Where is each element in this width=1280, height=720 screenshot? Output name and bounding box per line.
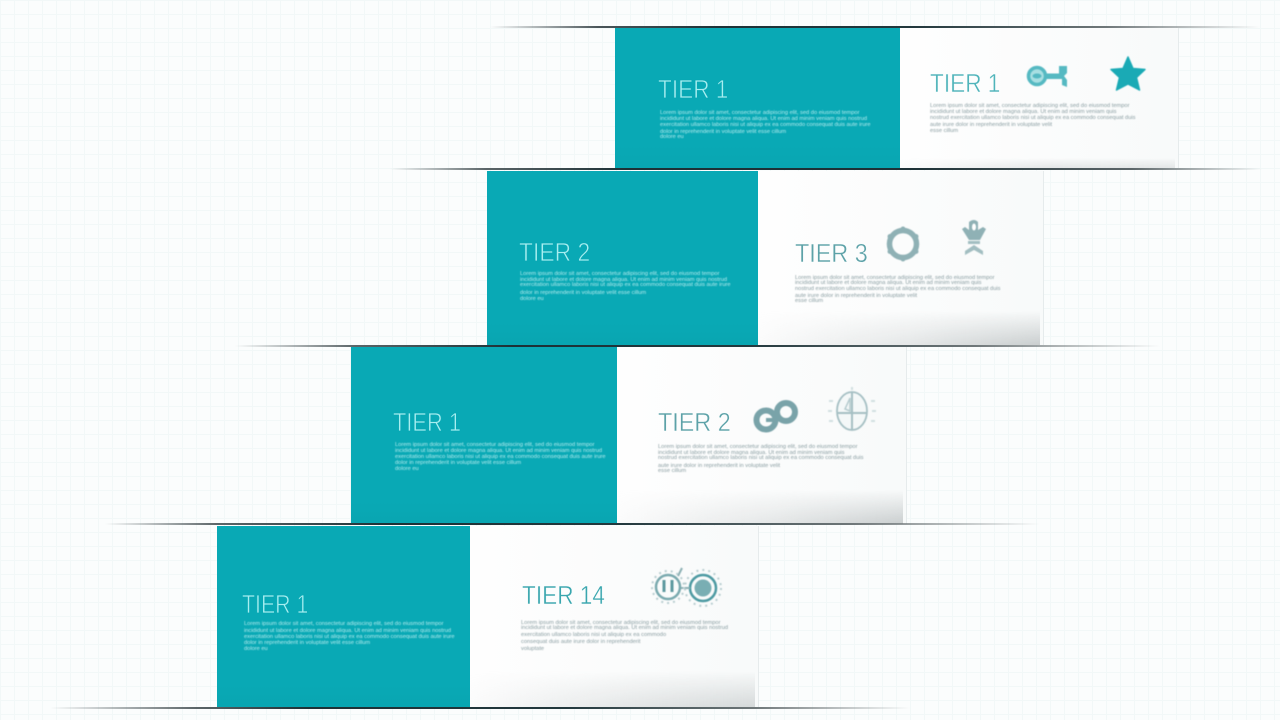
text block: row 1 teal body: Lorem ipsum dolor sit amet, consectetur adipiscing elit, sed do eiusmod tempor [660,110,859,116]
panel: row 3 teal [351,347,617,524]
text block: row 2 teal body: dolore eu [520,296,544,302]
text block: row 3 white body: aute irure dolor in reprehenderit in voluptate velit [658,463,780,469]
text block: row 4 teal body: dolor in reprehenderit in voluptate velit esse cillum [244,640,370,646]
text block: row 4 white body: consequat duis aute irure dolor in reprehenderit [521,639,641,645]
icon: globe dial [828,386,876,432]
panel: row 4 teal [217,526,470,707]
text block: row 1 white body [930,102,1136,134]
icon: robot figure [962,220,986,256]
heading: row 2 white title: TIER 3 [795,238,868,268]
text block: row 3 teal body: Lorem ipsum dolor sit amet, consectetur adipiscing elit, sed do eiusmod tempor [395,442,594,448]
icon: gear ring [886,226,920,262]
heading: row 3 white title: TIER 2 [658,407,731,437]
icon: dial pair [650,567,722,608]
text block: row 1 teal body [660,110,871,140]
text block: row 3 white body: incididunt ut labore et dolore magna aliqua. Ut enim ad minim veniam quis [658,450,845,456]
icon: key [1026,65,1068,88]
text block: row 2 white body: incididunt ut labore et dolore magna aliqua. Ut enim ad minim veniam quis [795,280,982,286]
text block: row 2 white body: esse cillum [795,298,823,304]
text block: row 1 teal body: incididunt ut labore et dolore magna aliqua. Ut enim ad minim veniam quis nostrud [660,116,867,122]
text block: row 3 white body [658,444,864,474]
text block: row 3 white body: esse cillum [658,468,686,474]
text block: row 3 white body: nostrud exercitation ullamco laboris nisi ut aliquip ex ea commodo consequat duis [658,455,864,461]
panel: row 4 white [470,526,759,707]
heading: row 1 white title: TIER 1 [930,68,1000,98]
text block: row 2 white body: nostrud exercitation ullamco laboris nisi ut aliquip ex ea commodo consequat duis [795,286,1000,292]
panel: row 2 teal [487,171,758,345]
text block: row 4 teal body: incididunt ut labore et dolore magna aliqua. Ut enim ad minim veniam quis nostrud [244,628,451,634]
text block: row 3 teal body: dolor in reprehenderit in voluptate velit esse cillum [395,460,521,466]
heading: row 3 teal title: TIER 1 [393,407,461,437]
text block: row 2 teal body: Lorem ipsum dolor sit amet, consectetur adipiscing elit, sed do eiusmod tempor [520,271,719,277]
text block: row 3 teal body: incididunt ut labore et dolore magna aliqua. Ut enim ad minim veniam quis nostrud [395,448,602,454]
text block: row 4 white body: Lorem ipsum dolor sit amet, consectetur adipiscing elit, sed do eiusmod tempor [521,620,720,626]
text block: row 2 white body: aute irure dolor in reprehenderit in voluptate velit [795,293,917,299]
heading: row 1 teal title: TIER 1 [658,74,728,104]
text block: row 1 white body: nostrud exercitation ullamco laboris nisi ut aliquip ex ea commodo consequat duis [930,115,1136,121]
text block: row 2 teal body [520,270,731,302]
text block: row 4 white body: voluptate [521,646,544,652]
tier row 2 [487,171,1044,345]
text block: row 1 teal body: dolor in reprehenderit in voluptate velit esse cillum [660,129,786,135]
text block: row 2 teal body: dolor in reprehenderit in voluptate velit esse cillum [520,290,646,296]
text block: row 4 teal body: Lorem ipsum dolor sit amet, consectetur adipiscing elit, sed do eiusmod tempor [244,621,443,627]
tier row 3 [351,347,907,524]
text block: row 1 white body: Lorem ipsum dolor sit amet, consectetur adipiscing elit, sed do eiusmod tempor [930,103,1129,109]
text block: row 1 teal body: dolore eu [660,134,684,140]
icon: linked gears [752,399,799,434]
text block: row 4 teal body: exercitation ullamco laboris nisi ut aliquip ex ea commodo consequat duis aute irure [244,634,455,640]
text block: row 3 white body: Lorem ipsum dolor sit amet, consectetur adipiscing elit, sed do eiusmod tempor [658,444,857,450]
text block: row 1 teal body: exercitation ullamco laboris nisi ut aliquip ex ea commodo consequat duis aute irure [660,122,871,128]
text block: row 3 teal body: exercitation ullamco laboris nisi ut aliquip ex ea commodo consequat duis aute irure [395,454,606,460]
text block: row 1 white body: aute irure dolor in reprehenderit in voluptate velit [930,122,1052,128]
text block: row 4 white body [520,620,728,652]
panel: row 1 white [900,28,1179,168]
text block: row 2 teal body: incididunt ut labore et dolore magna aliqua. Ut enim ad minim veniam quis nostrud [520,277,727,283]
heading: row 4 white title: TIER 14 [522,580,605,610]
text block: row 1 white body: esse cillum [930,128,958,134]
panel: row 1 teal [615,28,900,168]
icon: star [1110,56,1146,92]
panel: row 3 white [617,347,907,524]
heading: row 4 teal title: TIER 1 [242,589,308,619]
text block: row 1 white body: incididunt ut labore et dolore magna aliqua. Ut enim ad minim veniam quis [930,109,1117,115]
text block: row 4 white body: incididunt ut labore et dolore magna aliqua. Ut enim ad minim veniam quis nostrud [521,625,728,631]
text block: row 4 teal body [244,620,455,652]
panel: row 2 white [758,171,1044,345]
text block: row 2 white body: Lorem ipsum dolor sit amet, consectetur adipiscing elit, sed do eiusmod tempor [795,275,994,281]
text block: row 2 teal body: exercitation ullamco laboris nisi ut aliquip ex ea commodo consequat duis aute irure [520,282,731,288]
text block: row 4 white body: exercitation ullamco laboris nisi ut aliquip ex ea commodo [521,632,666,638]
text block: row 2 white body [794,274,1001,304]
tier row 1 [615,28,1179,168]
text block: row 3 teal body: dolore eu [395,466,419,472]
text block: row 3 teal body [394,442,606,472]
heading: row 2 teal title: TIER 2 [519,237,590,267]
tier row 4 [217,526,759,707]
text block: row 4 teal body: dolore eu [244,646,268,652]
